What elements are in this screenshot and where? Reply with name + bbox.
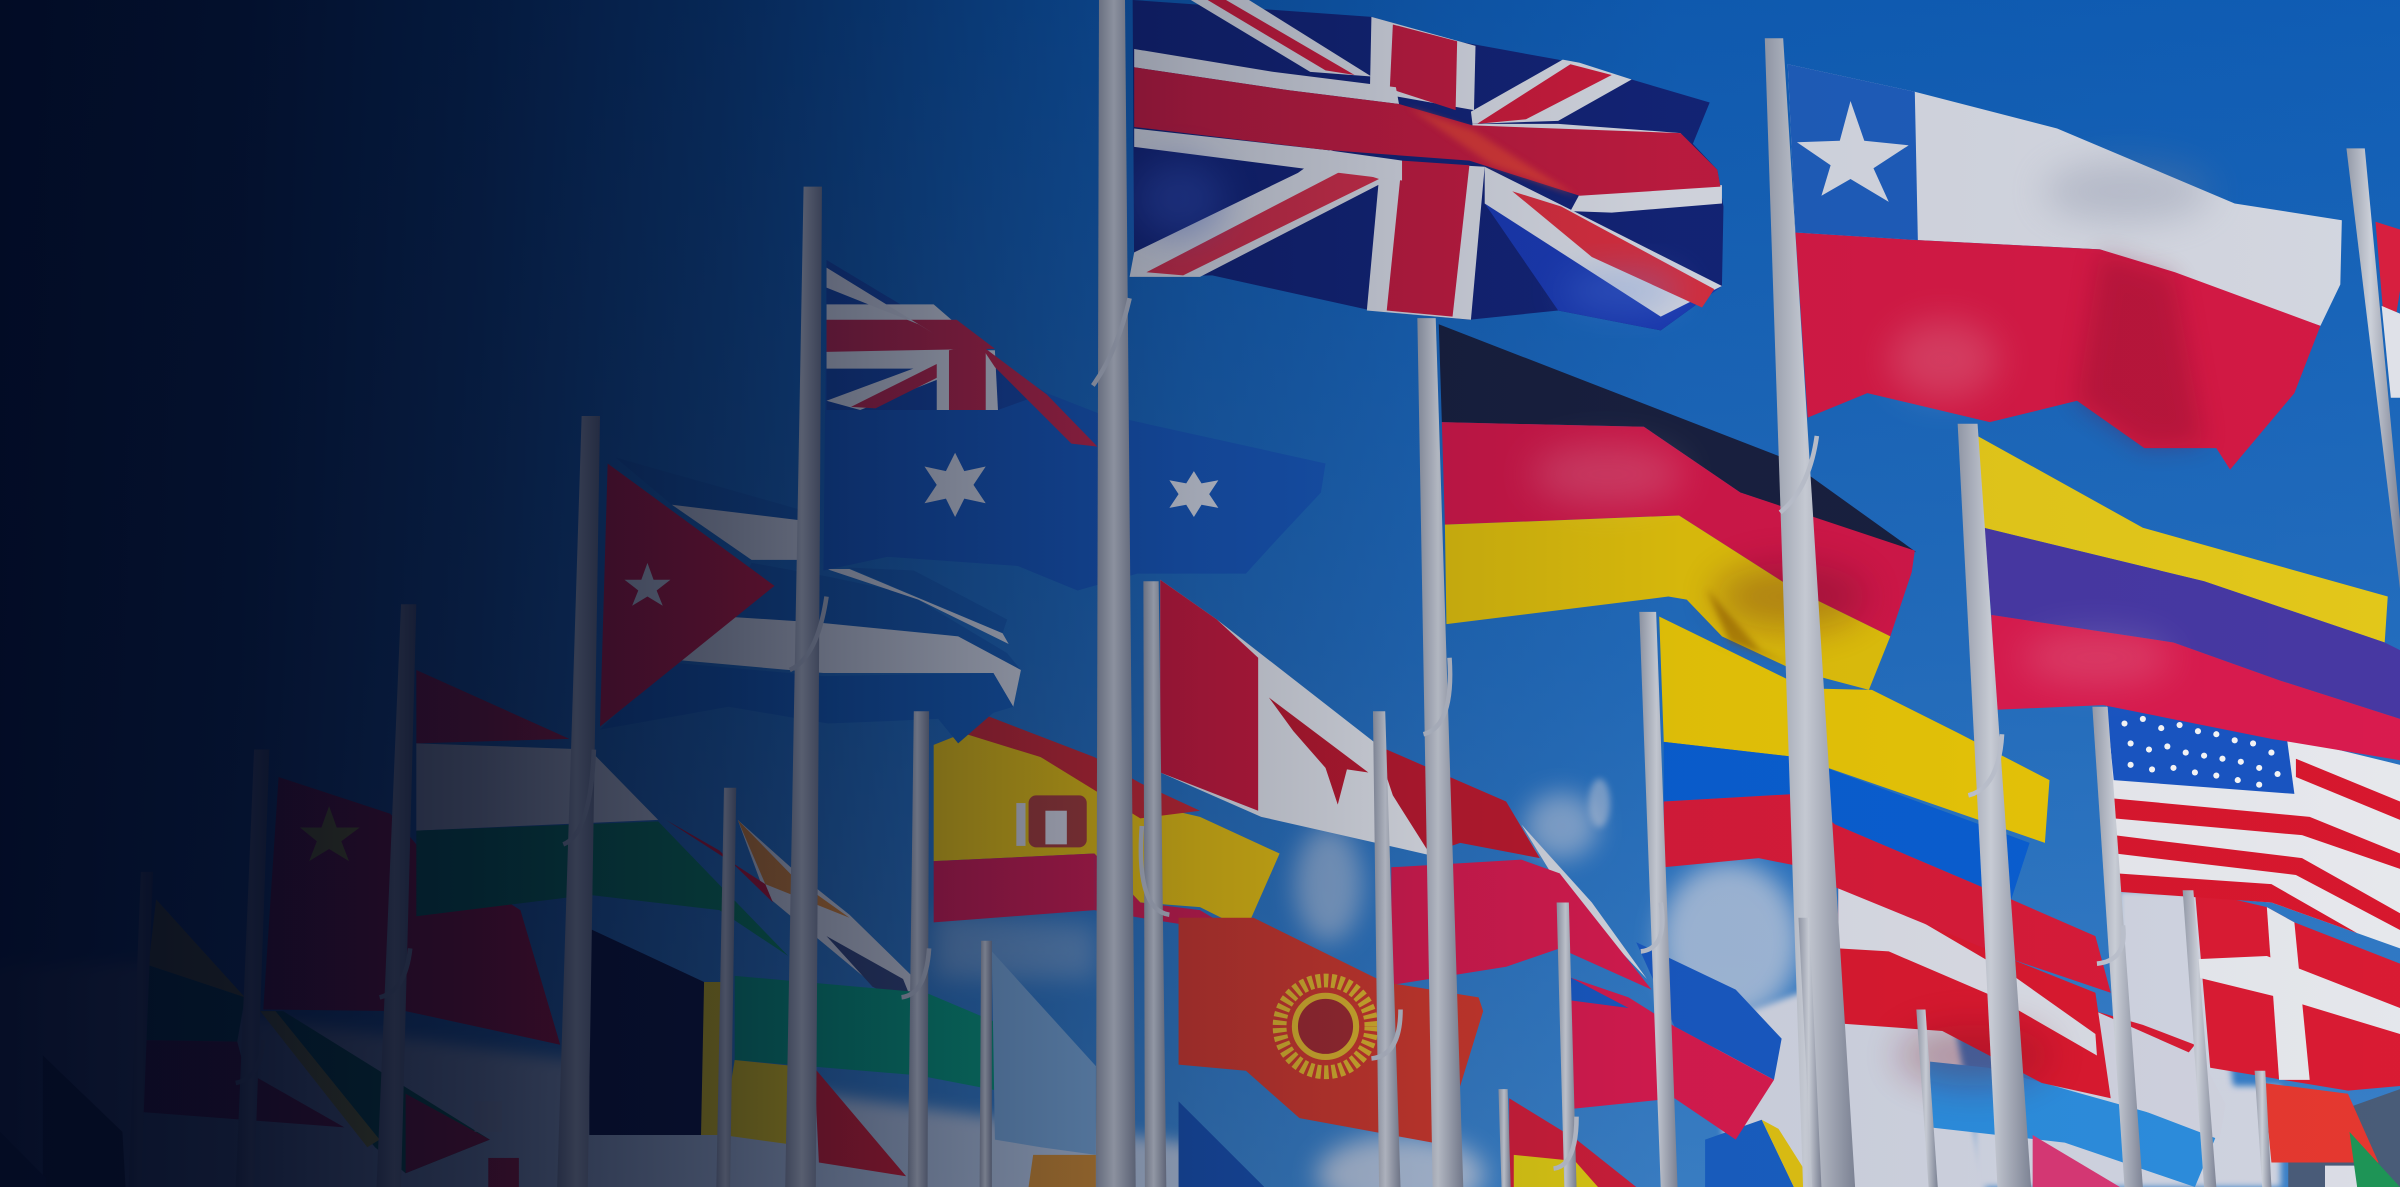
- union canton: [827, 260, 1097, 447]
- flag: bottom blue: [1179, 1101, 1264, 1187]
- flag: pale blue pennant: [992, 951, 1096, 1155]
- red triangle: [600, 463, 774, 727]
- flag: pink bottom: [2033, 1135, 2120, 1187]
- icon: star: [1797, 101, 1909, 202]
- flag: USA: [2106, 704, 2400, 948]
- flag: Spain: [934, 716, 1280, 933]
- horizontal band: [1134, 49, 1399, 104]
- flag: bright blue: [1930, 1062, 2218, 1187]
- flag: red and blue: [1570, 942, 1782, 1140]
- flag: Canada: [1160, 580, 1540, 858]
- building, bottom right: [2288, 1089, 2400, 1187]
- flag: Kyrgyzstan: [1179, 918, 1483, 1143]
- flag: red centre: [1391, 824, 1652, 990]
- flag: white-green with yellow and red: [722, 820, 1006, 1176]
- icon: star: [300, 806, 360, 861]
- flag: red lower right: [2264, 1083, 2400, 1187]
- icons: seven-point stars: [924, 453, 986, 517]
- far-left back flags: [0, 1055, 126, 1187]
- fabric fold shading: [1133, 161, 2212, 1086]
- flag: Germany: [1439, 324, 1916, 690]
- flag: Venezuela: [1978, 436, 2400, 760]
- diagonals: [1191, 0, 1371, 76]
- canton: [2106, 704, 2294, 794]
- flag: Lithuania-style tricolour: [141, 899, 490, 1173]
- flag: United Kingdom: [1130, 0, 1723, 330]
- flag: bottom orange: [1029, 1155, 1096, 1187]
- icon: star: [624, 563, 670, 606]
- flag: Ukraine-style: [1705, 1120, 1815, 1187]
- pole hooks: [236, 298, 2124, 1169]
- flag: black and yellow: [589, 928, 727, 1135]
- flag: China: [263, 777, 560, 1045]
- flag: Australia: [823, 260, 1326, 590]
- maple leaf: [1269, 698, 1368, 805]
- flag: Hungary tricolour: [416, 670, 788, 956]
- flag: red and white stripes: [1838, 887, 2226, 1140]
- flag: small red-yellow: [1509, 1098, 1636, 1187]
- icon: sun emblem: [1280, 980, 1371, 1072]
- vertical cross: [1370, 17, 1476, 110]
- flag: Cuba-style stripes: [600, 457, 1021, 743]
- coat of arms: [1016, 795, 1087, 847]
- flag: small Korean stripes: [474, 1101, 519, 1187]
- highlight: [1408, 107, 1577, 196]
- clouds: [0, 779, 2281, 1187]
- flag: Chile: [1788, 64, 2342, 470]
- flag: Denmark: [2195, 890, 2400, 1091]
- flag: right edge: [2376, 222, 2400, 398]
- flag: Colombia: [1659, 616, 2111, 993]
